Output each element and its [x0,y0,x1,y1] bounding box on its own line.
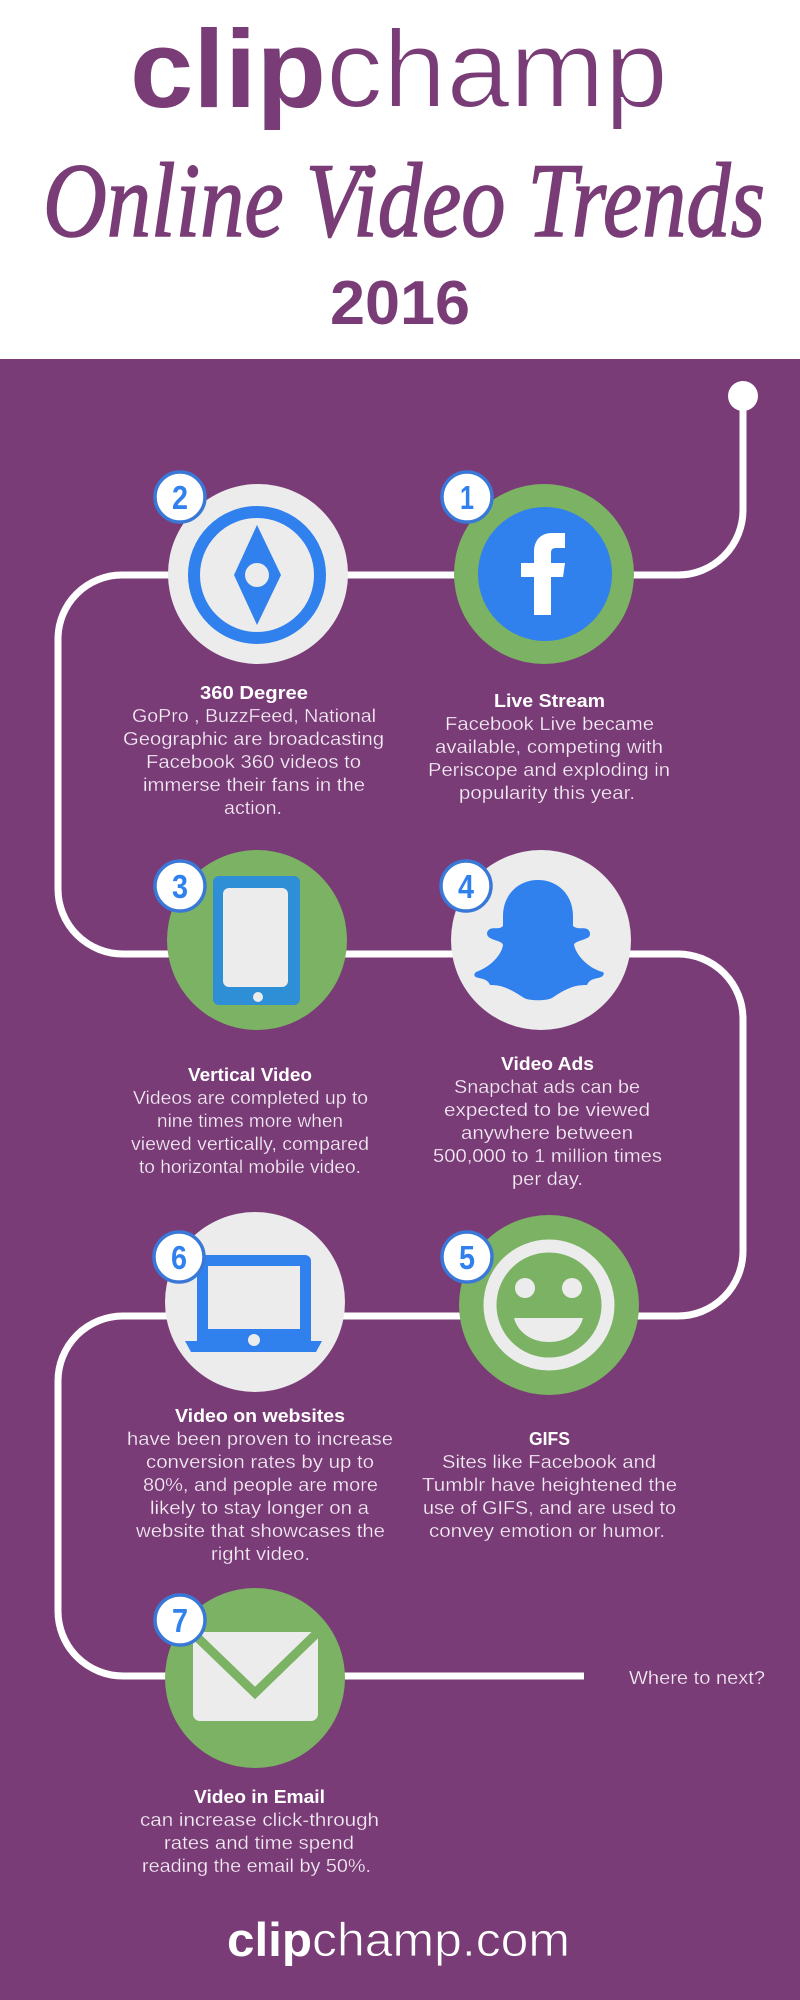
icon: facebook [454,484,634,664]
badge 5: 5 [459,1239,475,1276]
badge 2: 2 [172,479,188,516]
text: vertical video [131,1065,369,1177]
text: video ads [433,1054,662,1189]
badge 6 [154,1232,204,1282]
text: gifs [422,1429,677,1541]
icon: phone [167,850,347,1030]
badge 4: 4 [458,868,475,905]
text: video in email: rates and time spend [164,1833,354,1853]
logo: clipchamp: champ [326,8,668,131]
text: 360 degree: action. [224,798,282,818]
step 6: video on websites [127,1212,393,1564]
text: live stream: Live Stream [494,691,605,711]
timeline path [58,396,743,1676]
footer logo: clipchamp.com: champ.com [312,1913,570,1966]
text: 360 degree: Geographic are broadcasting [123,729,384,749]
logo: clipchamp: clip [130,8,326,131]
badge 7: 7 [172,1602,188,1639]
text: video on websites: have been proven to increase [127,1429,393,1449]
step 2: 360 degree [123,472,384,818]
text: video ads: per day. [512,1169,583,1189]
icon: smiley [459,1215,639,1395]
text: video on websites: conversion rates by up to [146,1452,374,1472]
text: video in email: can increase click-through [140,1810,379,1830]
text: video ads: expected to be viewed [444,1100,650,1120]
text: live stream: Periscope and exploding in [428,760,670,780]
text: vertical video: Videos are completed up to [133,1088,368,1108]
text: video in email: reading the email by 50%. [142,1856,371,1876]
icon: envelope [165,1588,345,1768]
text: video ads: Snapchat ads can be [454,1077,640,1097]
text: 360 degree [123,683,384,818]
badge 5 [442,1232,492,1282]
text: vertical video: viewed vertically, compared [131,1134,369,1154]
text: 360 degree: 360 Degree [200,683,308,703]
badge 3: 3 [172,868,188,905]
badge 1 [442,472,492,522]
text: video on websites: Video on websites [175,1406,345,1426]
logo: clipchamp [130,8,668,131]
text: video in email: Video in Email [194,1787,325,1807]
badge 4 [441,861,491,911]
text: live stream [428,691,670,803]
timeline start dot [728,381,758,411]
badge 3 [155,861,205,911]
text: 360 degree: immerse their fans in the [143,775,365,795]
text: 360 degree: GoPro , BuzzFeed, National [132,706,376,726]
text: live stream: popularity this year. [459,783,635,803]
footer logo: clipchamp.com: clip [227,1913,312,1966]
icon: laptop [165,1212,345,1392]
text: vertical video: nine times more when [157,1111,343,1131]
text: 360 degree: Facebook 360 videos to [146,752,361,772]
text: gifs: Tumblr have heightened the [422,1475,677,1495]
text: video in email [140,1787,379,1876]
badge 6: 6 [171,1239,187,1276]
badge 1: 1 [460,479,474,516]
text: video ads: anywhere between [461,1123,633,1143]
panel: header [0,0,800,359]
text: gifs: GIFS [529,1429,570,1449]
text: gifs: use of GIFS, and are used to [423,1498,676,1518]
badge 2 [155,472,205,522]
text: video ads: 500,000 to 1 million times [433,1146,662,1166]
text: live stream: available, competing with [435,737,663,757]
text: video ads: Video Ads [501,1054,594,1074]
text: video on websites: 80%, and people are more [143,1475,378,1495]
text: vertical video: Vertical Video [188,1065,312,1085]
year: 2016 [330,269,470,338]
step 3: vertical video [131,850,369,1177]
badge 7 [155,1595,205,1645]
text: gifs: Sites like Facebook and [442,1452,656,1472]
step 4: video ads [433,850,662,1189]
text: video on websites: right video. [211,1544,310,1564]
icon: snapchat ghost [451,850,631,1030]
step 5: gifs [422,1215,677,1541]
text: video on websites [127,1406,393,1564]
text: gifs: convey emotion or humor. [429,1521,665,1541]
step 7: video in email [140,1588,379,1876]
text: video on websites: website that showcases the [135,1521,385,1541]
text: video on websites: likely to stay longer on a [150,1498,370,1518]
text: vertical video: to horizontal mobile video. [139,1157,361,1177]
text: live stream: Facebook Live became [445,714,654,734]
label: where to next: Where to next? [629,1668,765,1688]
step 1: live stream [428,472,670,803]
icon: compass [168,484,348,664]
